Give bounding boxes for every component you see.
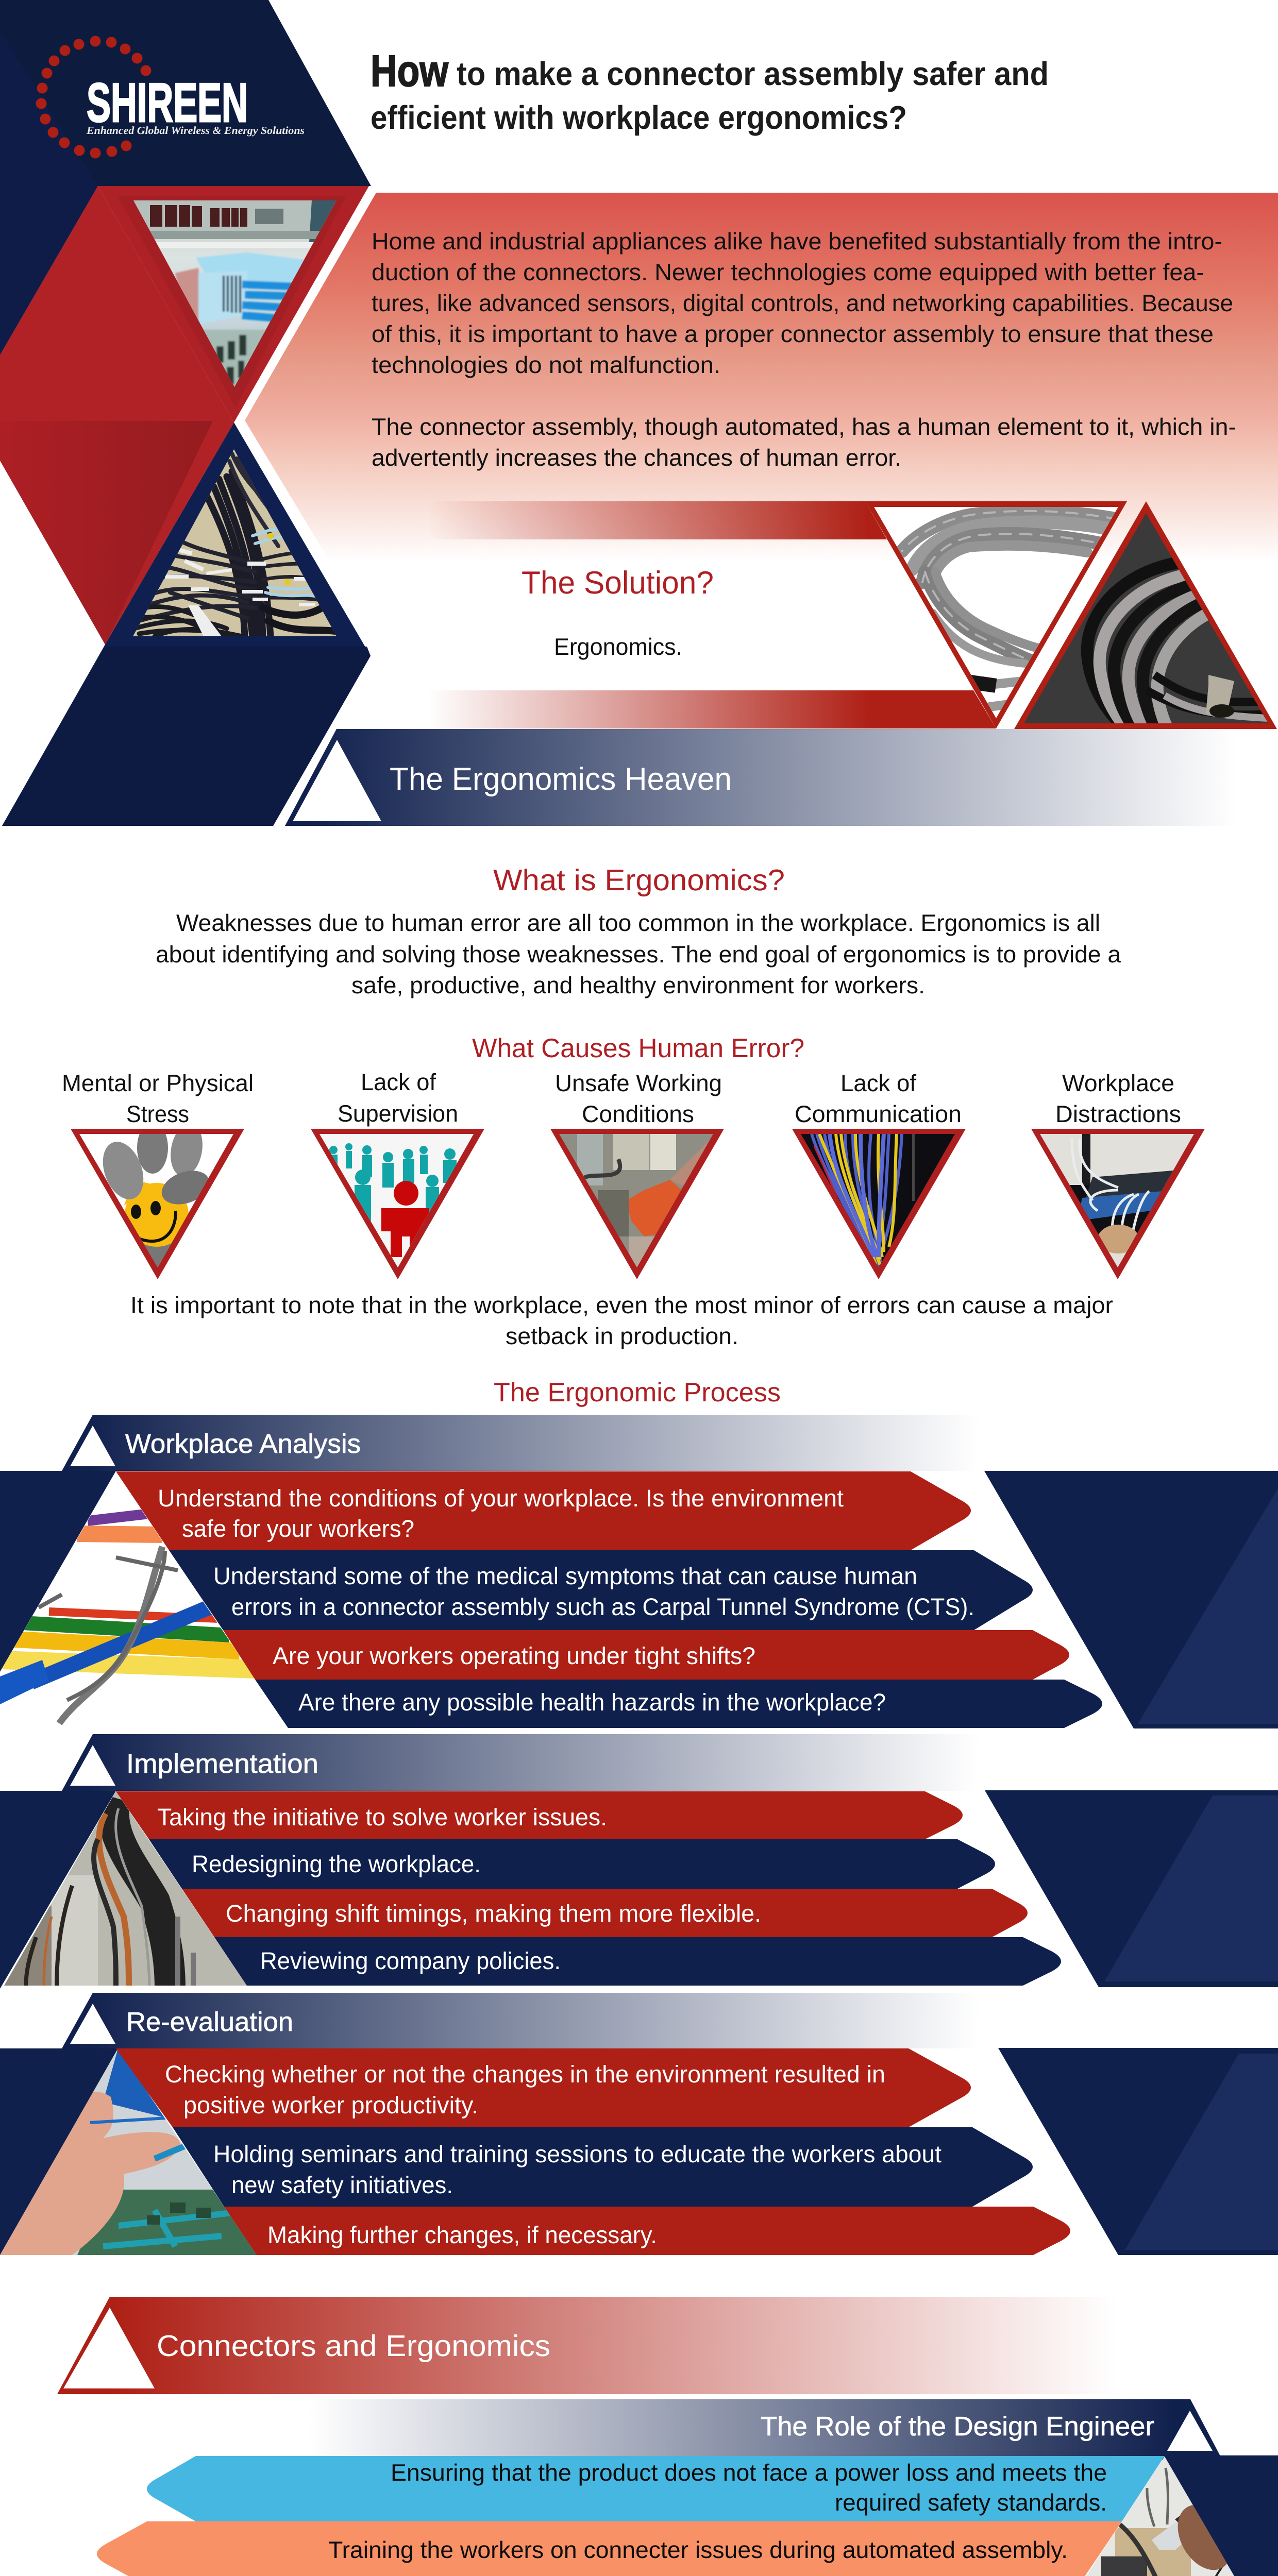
title: [371, 46, 1049, 136]
panel: design engineer heading: [309, 2399, 1220, 2456]
intro text: Home and industrial appliances alike have benefited substantially from the intro-: [372, 228, 1222, 255]
list: re-evaluation items: new safety initiatives.: [231, 2171, 453, 2198]
left navy wedge: [0, 1471, 116, 1672]
photo: network patch panel: [133, 200, 337, 387]
list: re-evaluation items: positive worker productivity.: [183, 2091, 478, 2119]
list: design engineer items: Training the workers on connecter issues during automated assembly.: [328, 2536, 1068, 2563]
logo: Shireen: Enhanced Global Wireless & Energy Solutions: [86, 124, 305, 137]
title: efficient with workplace ergonomics?: [371, 99, 907, 136]
panel: implementation heading: [62, 1734, 979, 1791]
heading: Connectors and Ergonomics band: [57, 2297, 1117, 2394]
heading: What is Ergonomics?: What is Ergonomics?: [493, 863, 785, 897]
logo: Shireen: SHIREEN: [87, 72, 248, 133]
panel: re-evaluation heading: [62, 1993, 979, 2048]
cause labels: Supervision: [338, 1100, 458, 1127]
photo: soldering workstation: [1031, 2456, 1278, 2576]
left navy wedge: [0, 1791, 116, 1989]
text: ergonomics definition: Weaknesses due to human error are all too common in the workplace. Ergonomics is all: [176, 909, 1100, 936]
intro text: technologies do not malfunction.: [372, 351, 720, 378]
panel: implementation heading: Implementation: [126, 1749, 318, 1779]
list: design engineer items: required safety standards.: [835, 2489, 1107, 2516]
right navy block: implementation: [985, 1790, 1278, 1987]
right navy block: workplace analysis: [984, 1471, 1278, 1728]
cause labels: Unsafe Working: [555, 1070, 722, 1096]
list: implementation items: Changing shift timings, making them more flexible.: [226, 1900, 761, 1927]
heading: The Ergonomics Heaven band: [285, 729, 1237, 826]
list: re-evaluation items: Checking whether or not the changes in the environment resulted in: [165, 2060, 885, 2088]
panel: re-evaluation heading: Re-evaluation: [126, 2007, 293, 2037]
right navy block: [1159, 2455, 1278, 2576]
intro text: advertently increases the chances of human error.: [372, 444, 901, 471]
photo: server room cable bundles: [0, 1791, 247, 1989]
list: implementation items: Taking the initiative to solve worker issues.: [157, 1803, 607, 1831]
list: workplace analysis items: [116, 1471, 1102, 1728]
heading: What Causes Human Error?: What Causes Human Error?: [472, 1033, 804, 1063]
intro text: tures, like advanced sensors, digital controls, and networking capabilities. Because: [372, 290, 1233, 316]
heading: The Ergonomic Process: The Ergonomic Process: [494, 1378, 781, 1408]
text: minor errors note: It is important to note that in the workplace, even the most minor of errors can cause a major: [130, 1292, 1113, 1318]
list: workplace analysis items: Understand the conditions of your workplace. Is the environment: [158, 1484, 844, 1512]
panel: the solution bars: [428, 501, 996, 728]
photo: black and grey coiled cable in red frame: [1014, 501, 1277, 729]
list: re-evaluation items: Holding seminars and training sessions to educate the workers about: [213, 2140, 941, 2167]
cause labels: Stress: [126, 1100, 189, 1127]
cause labels: Lack of: [361, 1069, 436, 1095]
cause labels: Lack of: [840, 1070, 916, 1096]
panel: intro gradient background: [245, 193, 1278, 562]
list: workplace analysis items: safe for your workers?: [182, 1515, 414, 1542]
text: ergonomics definition: safe, productive, and healthy environment for workers.: [351, 972, 925, 998]
list: implementation items: [116, 1791, 1061, 1986]
list: implementation items: Redesigning the workplace.: [192, 1850, 481, 1877]
title: How: [371, 46, 449, 96]
left navy wedge: [0, 2048, 118, 2255]
text: minor errors note: [130, 1292, 1113, 1349]
panel: workplace analysis heading: Workplace Analysis: [125, 1429, 361, 1459]
right navy block: re-evaluation: [998, 2048, 1278, 2255]
lower left navy hexagon: [2, 422, 371, 826]
list: workplace analysis items: Are there any possible health hazards in the workplace?: [298, 1688, 886, 1716]
cause labels: [62, 1069, 1181, 1127]
panel: workplace analysis heading: [62, 1415, 979, 1471]
text: ergonomics definition: [156, 909, 1121, 998]
icon: stress ball triangle: [71, 1121, 244, 1279]
heading: The Solution?: The Solution?: [522, 565, 714, 601]
text: Ergonomics.: Ergonomics.: [554, 633, 682, 660]
text: ergonomics definition: about identifying and solving those weaknesses. The end goal of ergonomics is to provide a: [156, 941, 1121, 968]
list: workplace analysis items: Understand some of the medical symptoms that can cause human: [213, 1562, 917, 1589]
list: re-evaluation items: Making further changes, if necessary.: [267, 2221, 657, 2248]
photo: hand plugging a network cable: [0, 2048, 258, 2255]
text: minor errors note: setback in production.: [506, 1323, 738, 1349]
photo: coloured cables and barbed wire: [0, 1510, 255, 1725]
cause labels: Communication: [795, 1100, 962, 1127]
icon: tangled wires triangle: [792, 1129, 966, 1279]
heading: The Ergonomics Heaven band: The Ergonomics Heaven: [390, 761, 732, 797]
cause labels: Workplace: [1062, 1070, 1174, 1096]
intro text: The connector assembly, though automated, has a human element to it, which in-: [372, 413, 1236, 440]
intro text: of this, it is important to have a proper connector assembly to ensure that these: [372, 320, 1214, 347]
heading: Connectors and Ergonomics band: Connectors and Ergonomics: [157, 2329, 550, 2363]
list: design engineer items: Ensuring that the product does not face a power loss and meets the: [391, 2459, 1107, 2486]
cause labels: Distractions: [1055, 1100, 1181, 1127]
photo: cable harness: [133, 449, 337, 636]
list: design engineer items: [48, 2456, 1165, 2576]
list: workplace analysis items: Are your workers operating under tight shifts?: [273, 1642, 755, 1669]
intro text: [372, 228, 1236, 471]
cause labels: Conditions: [582, 1100, 694, 1127]
icon: gloved hand triangle: [550, 1129, 724, 1279]
panel: design engineer heading: The Role of the Design Engineer: [761, 2412, 1154, 2442]
photo: braided grey cable in red frame: [865, 501, 1127, 728]
cause labels: Mental or Physical: [62, 1070, 254, 1096]
list: workplace analysis items: errors in a connector assembly such as Carpal Tunnel Syndrome (CTS).: [231, 1593, 974, 1620]
header left navy block: [0, 0, 371, 355]
list: implementation items: Reviewing company policies.: [260, 1947, 561, 1974]
left red hexagon: [0, 186, 369, 645]
logo: Shireen: [36, 36, 305, 159]
icon: network rack triangle: [1031, 1129, 1205, 1279]
list: re-evaluation items: [116, 2048, 1070, 2255]
title: to make a connector assembly safer and: [457, 55, 1049, 92]
intro text: duction of the connectors. Newer technologies come equipped with better fea-: [372, 259, 1204, 285]
icon: supervision figures triangle: [311, 1129, 484, 1279]
